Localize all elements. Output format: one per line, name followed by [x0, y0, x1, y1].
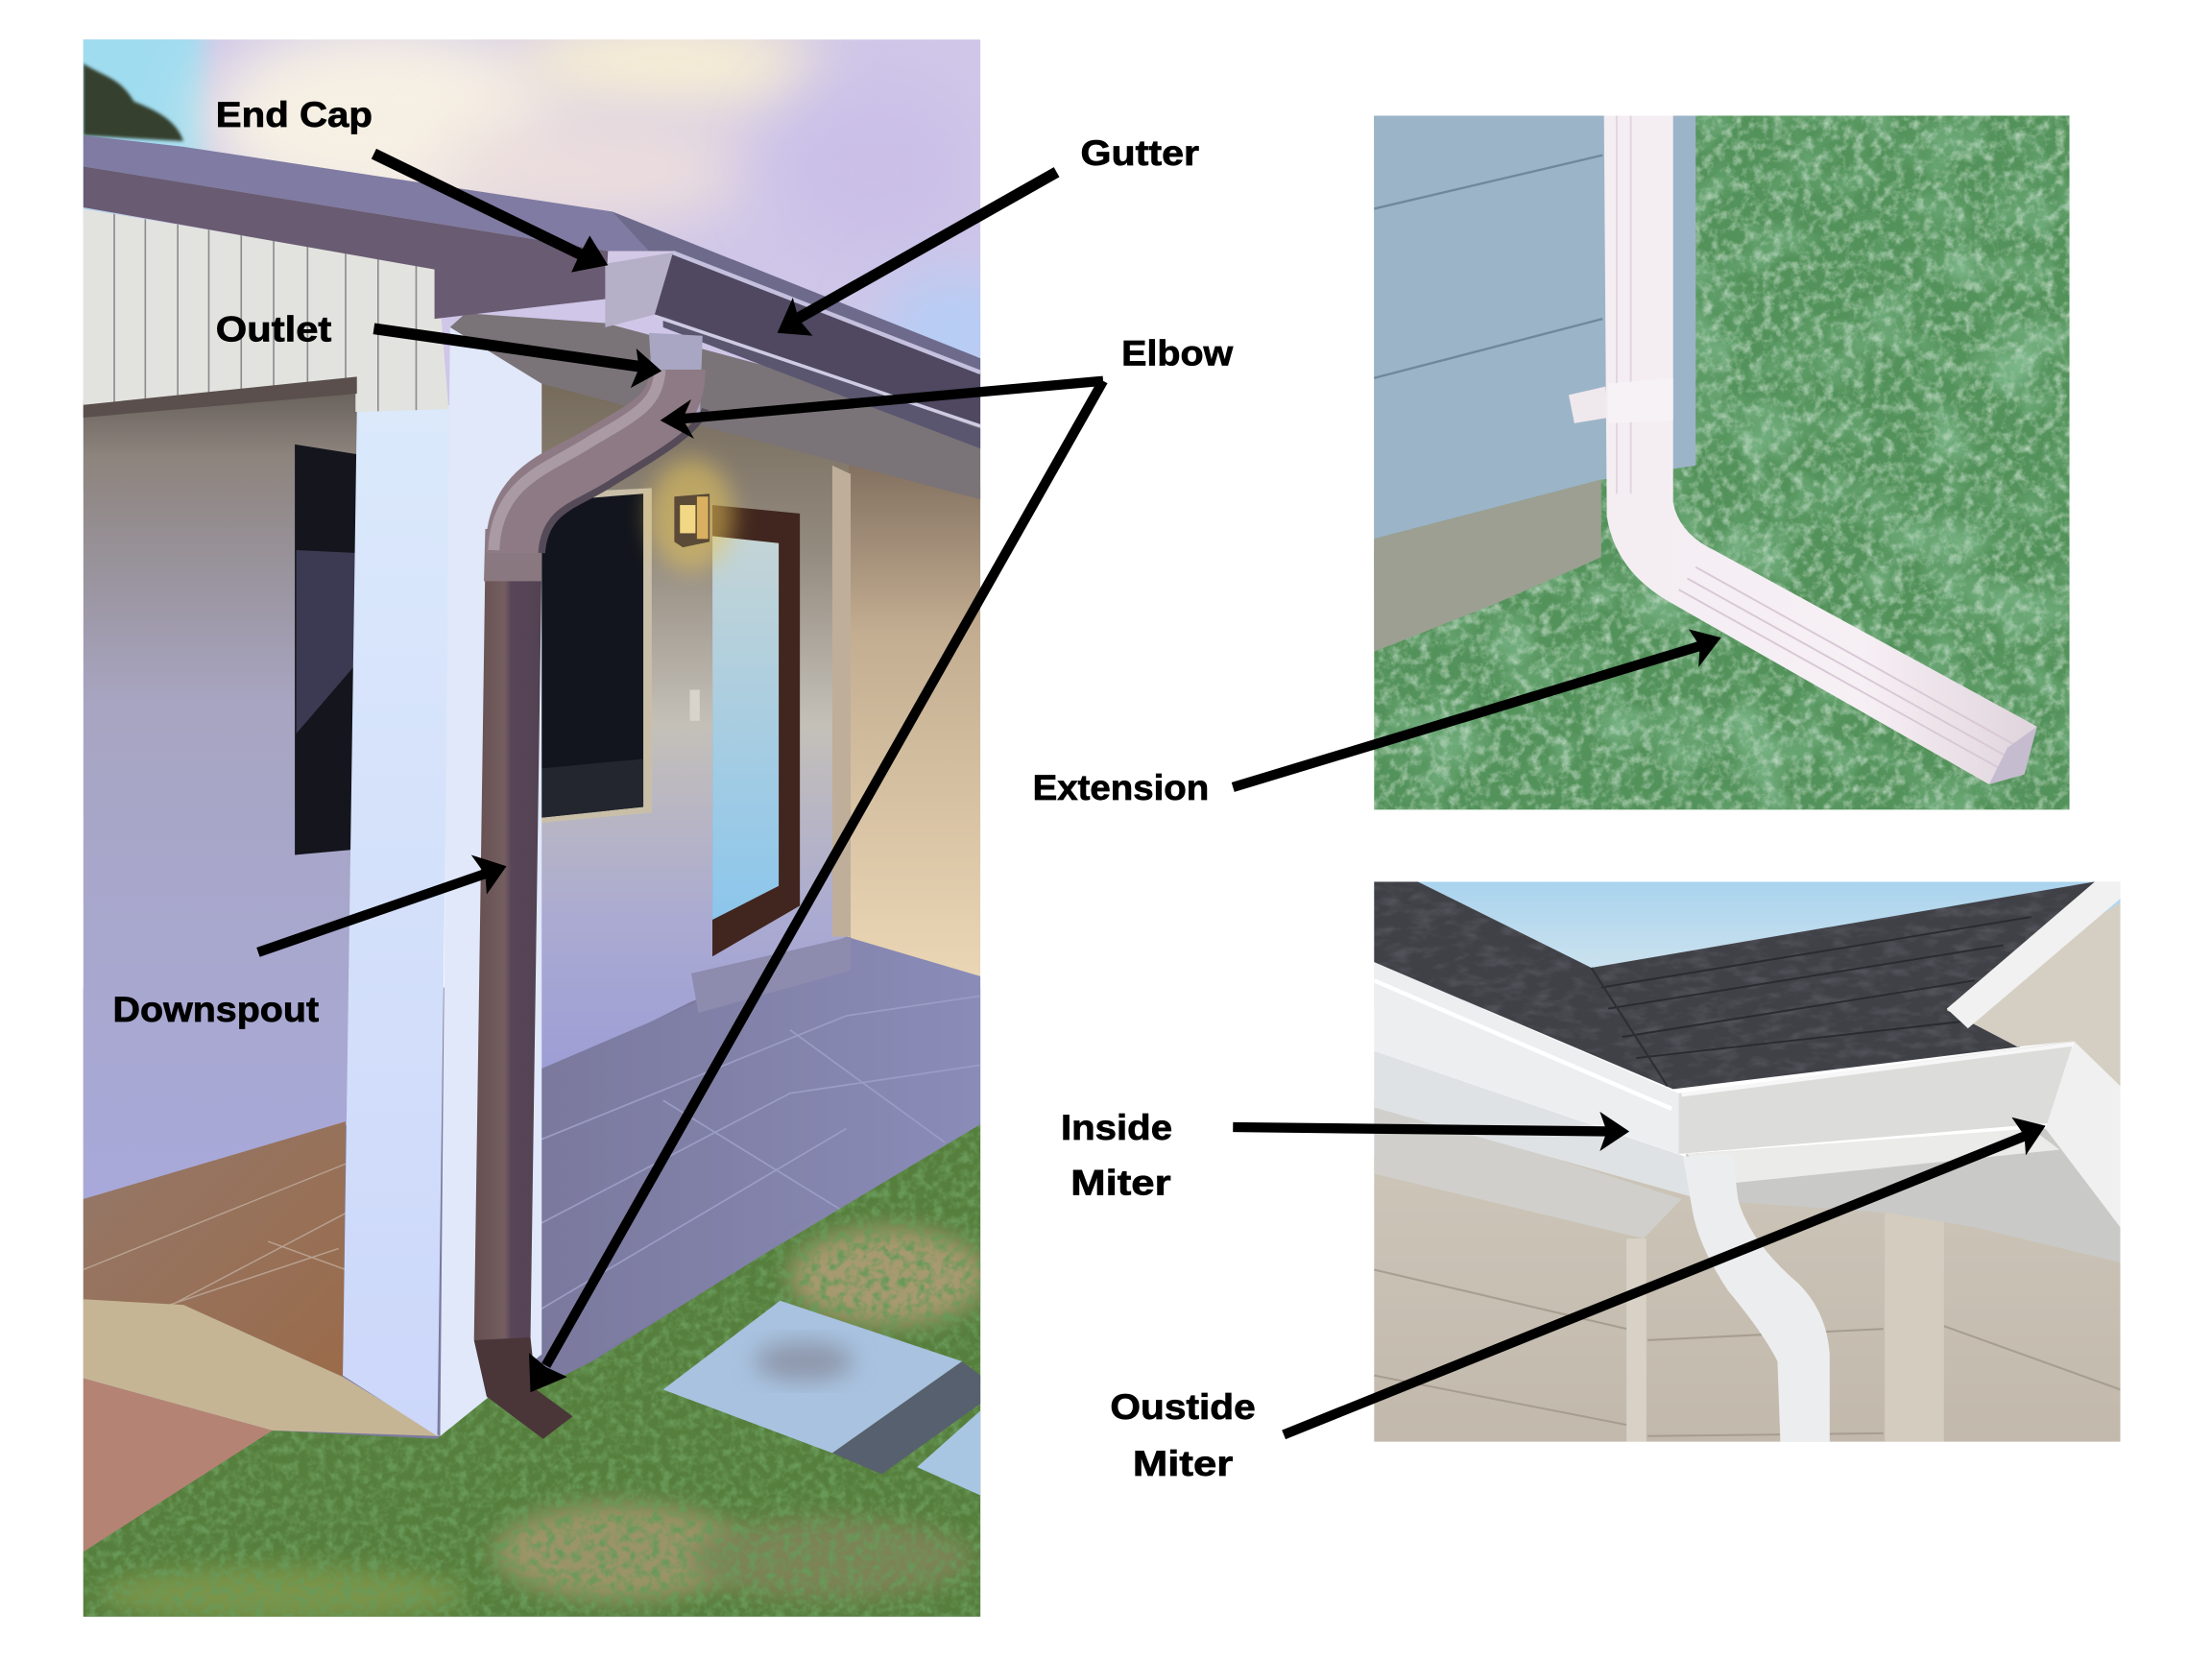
porch step — [691, 937, 851, 1013]
soffit left — [1374, 1100, 1682, 1238]
panel: extension photo — [1374, 115, 2070, 809]
soffit — [450, 313, 980, 499]
fascia beam — [84, 166, 608, 319]
gutter left — [1374, 962, 1700, 1199]
label: Inside Miter — [1061, 1108, 1172, 1203]
pink stone slab — [84, 1379, 273, 1551]
label: Oustide Miter: Oustide — [1110, 1387, 1256, 1427]
label: Elbow: Elbow — [1121, 334, 1234, 373]
label: Extension: Extension — [1033, 768, 1209, 807]
door trim — [832, 466, 851, 937]
arrow: Inside Miter — [1233, 1112, 1629, 1151]
porch floor right — [541, 937, 981, 1310]
label: Inside Miter: Miter — [1070, 1164, 1171, 1203]
label: End Cap: End Cap — [216, 95, 373, 134]
right wall — [848, 451, 980, 976]
porch floor left — [84, 1121, 346, 1377]
arrow: Outlet — [373, 328, 661, 388]
soffit right — [1686, 1129, 2120, 1262]
center window — [530, 488, 652, 824]
gutter elbow — [493, 370, 706, 553]
label: Gutter: Gutter — [1081, 133, 1199, 173]
gutter end cap — [605, 252, 673, 327]
ground and grass — [84, 1115, 988, 1623]
left window — [295, 445, 357, 854]
label: Outlet: Outlet — [216, 310, 331, 349]
left wall — [84, 373, 360, 1199]
beige gable — [1947, 902, 2120, 1086]
white downspout — [1683, 1154, 1830, 1442]
grass background — [1374, 115, 2070, 809]
bottom elbow — [474, 1337, 573, 1439]
vertical trim — [1626, 1238, 1647, 1442]
arrow: Downspout — [258, 854, 507, 952]
arrow: Elbow upper — [661, 381, 1103, 439]
pillar side — [440, 327, 541, 1436]
concrete curb — [84, 1299, 440, 1436]
rake trim — [1947, 881, 2120, 1028]
arrow: Gutter — [778, 172, 1057, 336]
door — [712, 505, 800, 956]
light switch — [690, 690, 700, 721]
arrow: Outside Miter — [1284, 1118, 2046, 1434]
roof band — [84, 135, 663, 252]
shingles — [1374, 881, 2120, 1094]
label: Inside Miter: Inside — [1061, 1108, 1172, 1147]
label: Oustide Miter: Miter — [1133, 1444, 1233, 1483]
arrow: End Cap — [373, 154, 608, 273]
corner trim — [1885, 1211, 1944, 1442]
panel: house photo with gutter system — [28, 0, 1022, 1623]
siding boards — [84, 198, 448, 423]
siding wall — [1374, 115, 1695, 539]
siding wall — [1374, 1157, 2120, 1442]
label: Downspout: Downspout — [113, 990, 319, 1029]
lower backdrop — [84, 988, 980, 1617]
arrow: Elbow lower — [529, 381, 1103, 1392]
concrete foundation — [1374, 480, 1601, 652]
outlet section — [649, 333, 703, 423]
white downspout with extension — [1604, 115, 2037, 784]
wall lamp — [649, 459, 733, 571]
sky — [1374, 881, 2120, 1009]
stone slab — [663, 1301, 962, 1453]
arrow: Extension — [1233, 629, 1721, 787]
tree — [84, 63, 183, 141]
label: Oustide Miter — [1110, 1387, 1256, 1483]
center wall — [536, 370, 848, 1079]
sky — [83, 39, 981, 492]
gutter run — [655, 252, 980, 448]
downspout — [474, 529, 541, 1340]
panel: miter corner photo — [1374, 881, 2120, 1442]
gravel and second slab — [832, 1361, 980, 1496]
gutter right — [1679, 1041, 2120, 1227]
roof edge upper — [613, 211, 980, 378]
porch ceiling edge — [84, 376, 357, 418]
mounting bracket — [1569, 387, 1608, 423]
pillar front — [343, 405, 451, 1436]
